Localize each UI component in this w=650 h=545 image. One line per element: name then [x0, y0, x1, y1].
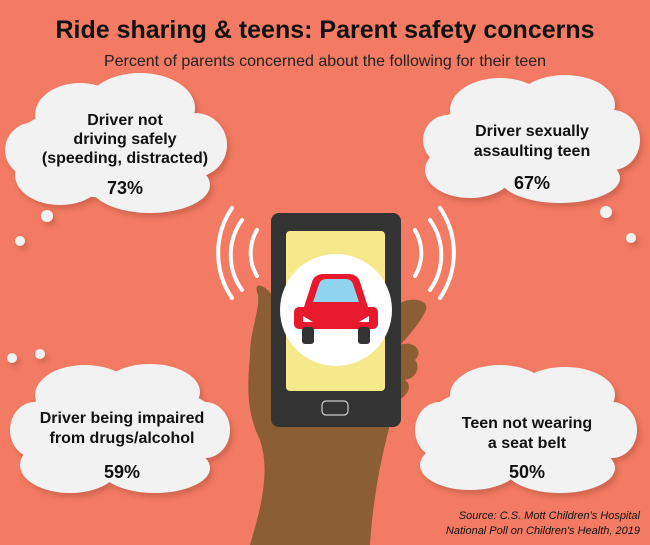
cloud: sexual assault [423, 75, 640, 243]
cloud: impaired [7, 349, 230, 493]
source [446, 510, 641, 537]
cloud: seat belt [415, 365, 637, 493]
text: driver not driving safely: driving safely [73, 131, 177, 148]
icon: car [294, 274, 378, 344]
text: seat belt [462, 415, 592, 482]
text: sexual assault: Driver sexually [475, 123, 589, 140]
text: impaired: Driver being impaired [40, 410, 204, 427]
text: impaired: 59% [104, 462, 140, 482]
text: sexual assault: assaulting teen [474, 143, 590, 160]
waves left [218, 208, 257, 298]
text: seat belt: a seat belt [488, 435, 567, 452]
waves right [415, 208, 454, 298]
source: National Poll on Children's Health, 2019 [446, 525, 640, 537]
text: seat belt: Teen not wearing [462, 415, 592, 432]
text: seat belt: 50% [509, 462, 545, 482]
text: driver not driving safely: Driver not [87, 112, 163, 129]
text: impaired [40, 410, 204, 482]
text: driver not driving safely [42, 112, 208, 198]
cloud: driver not driving safely [5, 73, 227, 246]
text: driver not driving safely: 73% [107, 178, 143, 198]
source: Source: C.S. Mott Children's Hospital [459, 510, 641, 522]
hand and phone [248, 213, 426, 545]
subtitle: Percent of parents concerned about the following for their teen [104, 53, 546, 70]
text: sexual assault [474, 123, 590, 193]
text: driver not driving safely: (speeding, distracted) [42, 150, 208, 167]
title: Ride sharing & teens: Parent safety concerns [55, 16, 595, 44]
text: impaired: from drugs/alcohol [50, 430, 194, 447]
text: sexual assault: 67% [514, 173, 550, 193]
